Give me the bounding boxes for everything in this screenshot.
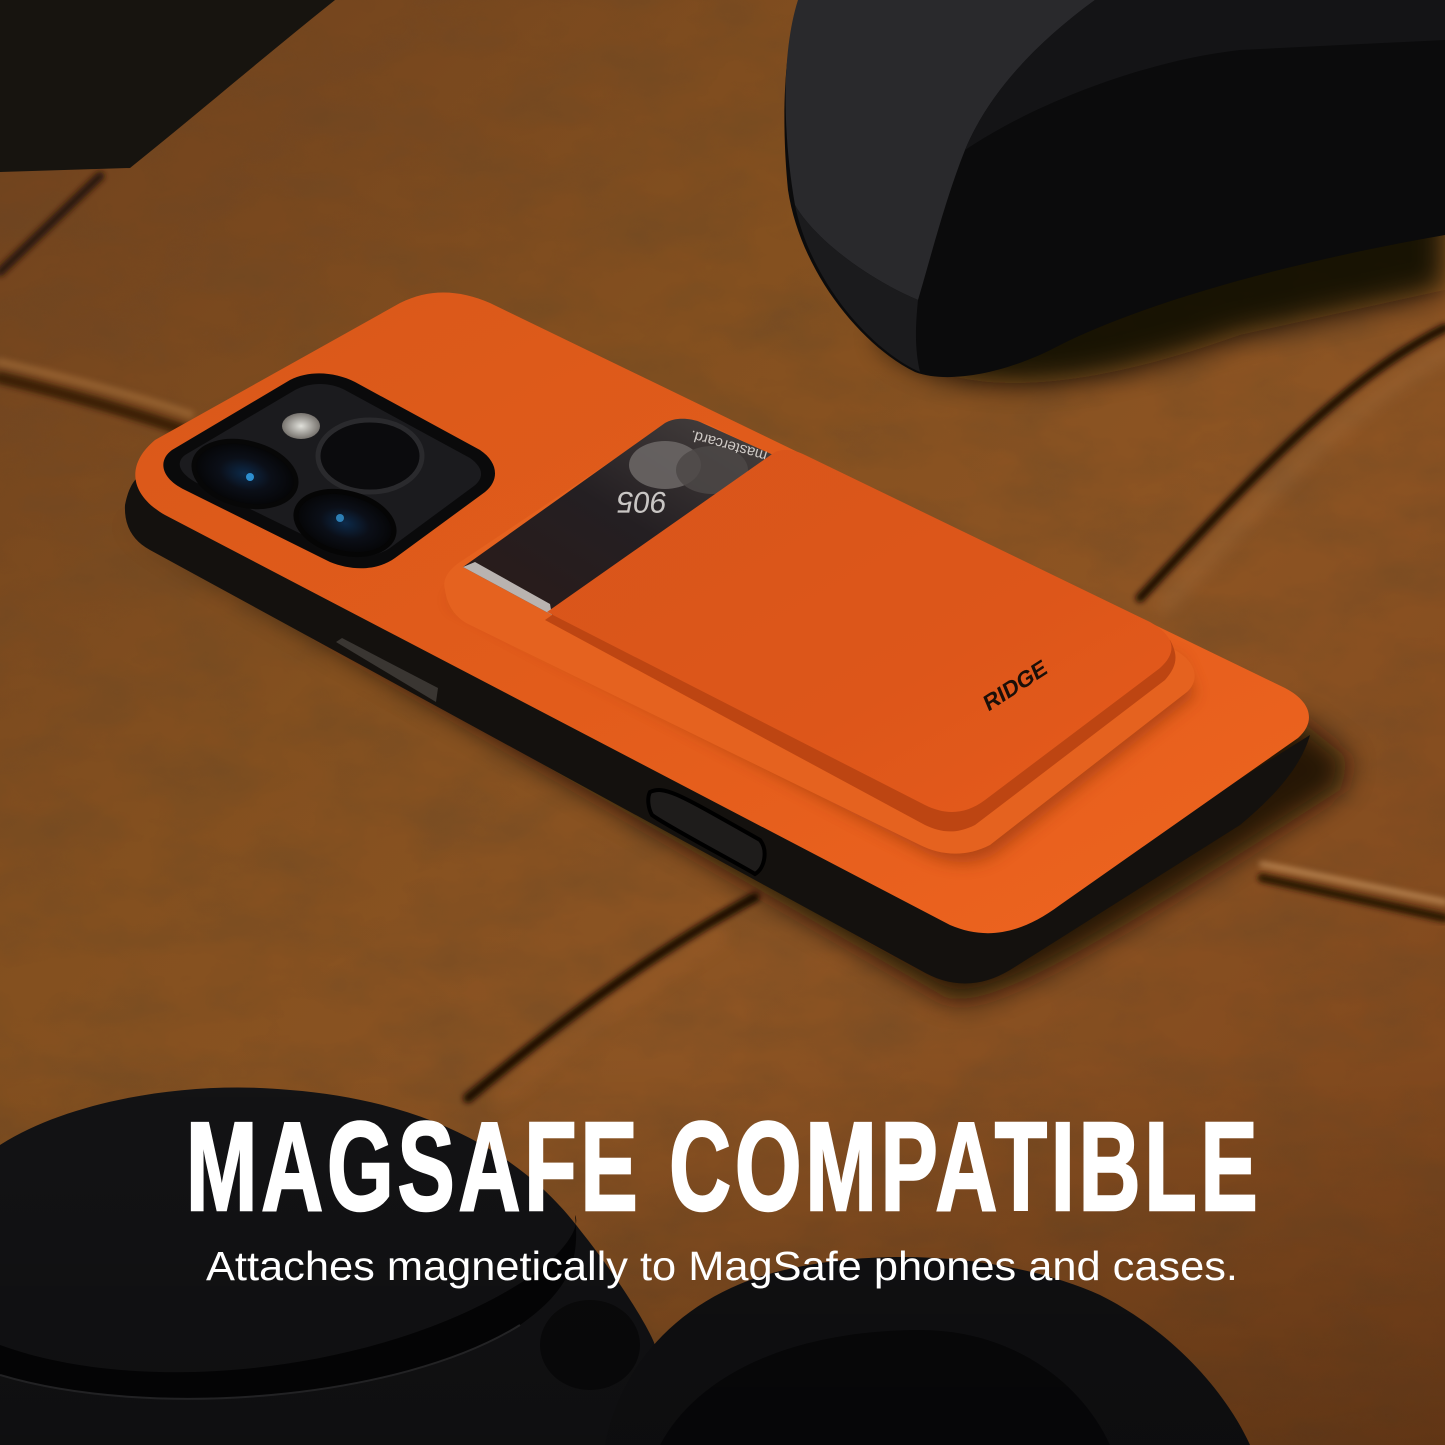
lens: top [318,420,422,492]
phone black side [125,470,1310,984]
subtitle: Attaches magnetically to MagSafe phones and cases. [206,1243,1238,1289]
wallet card [463,419,780,615]
wallet card: mastercard. [688,426,769,464]
wallet pocket face [547,450,1171,812]
dark cushion top left [0,0,335,172]
earbud case bottom right [605,1257,1250,1445]
side buttons [336,638,438,702]
game controller shadow [880,0,1445,383]
text legibility shade [0,1050,1445,1445]
wallet pocket side [545,455,1175,831]
brand logo: RIDGE [980,654,1050,717]
camera island [163,373,495,568]
phone orange back [135,292,1309,933]
title: MAGSAFE COMPATIBLE [186,1095,1258,1237]
wallet card: 905 [614,485,669,518]
wallet base plate [444,420,1195,854]
game controller [784,0,1445,377]
lens: bottom [289,482,401,564]
earbud case bottom left [0,1087,655,1445]
phone [125,292,1310,984]
wallet plate shadow [450,500,1195,862]
wallet [444,419,1195,862]
phone cast shadow [120,520,1350,1000]
flash [282,413,320,439]
lens: left [187,431,303,517]
leather seams [0,176,1445,1100]
